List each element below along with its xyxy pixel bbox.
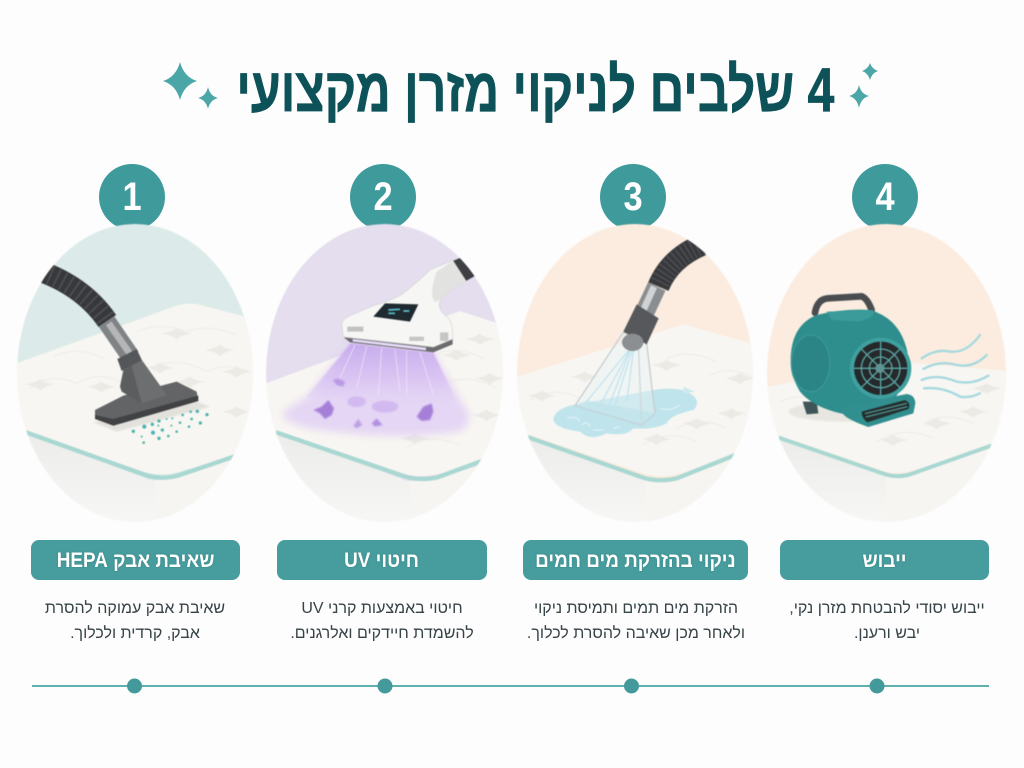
UV light beam (283, 343, 469, 436)
text: step 2 description: להשמדת חיידקים ואלרגנים. (290, 624, 474, 642)
text: step 2 description (290, 600, 474, 642)
icon: left sparkles (163, 62, 218, 109)
text: step 3 description: הזרקת מים תמים ותמיסת ניקוי (534, 600, 738, 617)
mattress (768, 362, 1006, 522)
water puddle (553, 387, 697, 437)
text: step 1 description: שאיבת אבק עמוקה להסרת (45, 600, 225, 617)
heading: step 3 (523, 540, 748, 580)
step number 2 (350, 164, 416, 230)
text: step 3 description (527, 600, 745, 642)
heading: step 3: ניקוי בהזרקת מים חמים (535, 549, 736, 572)
illustration: hot water extraction (516, 223, 753, 521)
text: step 4 description: ייבוש יסודי להבטחת מזרן נקי, (789, 600, 985, 617)
text: step 1 description (45, 600, 225, 642)
step number 3 (600, 164, 666, 230)
illustration: UV disinfection (266, 223, 503, 521)
heading: step 4: ייבוש (862, 549, 907, 572)
extraction hose (622, 245, 702, 351)
heading: step 1: שאיבת אבק HEPA (57, 549, 214, 572)
step number 3: 3 (623, 175, 643, 219)
heading: step 4 (780, 540, 989, 580)
vacuum hose (30, 268, 142, 371)
text: step 4 description (789, 600, 985, 642)
water nozzle (575, 332, 655, 425)
step number 4 (852, 164, 918, 230)
heading: step 2 (277, 540, 487, 580)
air mover fan (788, 296, 915, 427)
text: step 2 description: חיטוי באמצעות קרני UV (301, 600, 463, 617)
icon: right sparkles (849, 63, 878, 108)
text: step 4 description: יבש ורענן. (854, 624, 920, 642)
vacuum head (93, 360, 210, 432)
timeline (32, 678, 989, 694)
step number 1 (99, 164, 165, 230)
step number 4: 4 (875, 175, 895, 219)
illustration: drying with air mover (766, 223, 1006, 522)
mattress (266, 311, 503, 522)
mattress (16, 304, 254, 522)
text: step 1 description: אבק, קרדית ולכלוך. (70, 624, 200, 642)
mattress (517, 324, 753, 522)
air flow waves (922, 335, 988, 397)
allergens (313, 378, 433, 428)
step number 1: 1 (122, 175, 142, 219)
dust particles (132, 410, 209, 444)
step number 2: 2 (373, 175, 393, 219)
text: step 3 description: ולאחר מכן שאיבה להסרת לכלוך. (527, 624, 745, 642)
illustration: vacuuming mattress (17, 223, 253, 521)
title: 4 שלבים לניקוי מזרן מקצועי (236, 56, 834, 125)
UV device (342, 257, 477, 352)
heading: step 1 (31, 540, 240, 580)
heading: step 2: חיטוי UV (345, 549, 419, 572)
